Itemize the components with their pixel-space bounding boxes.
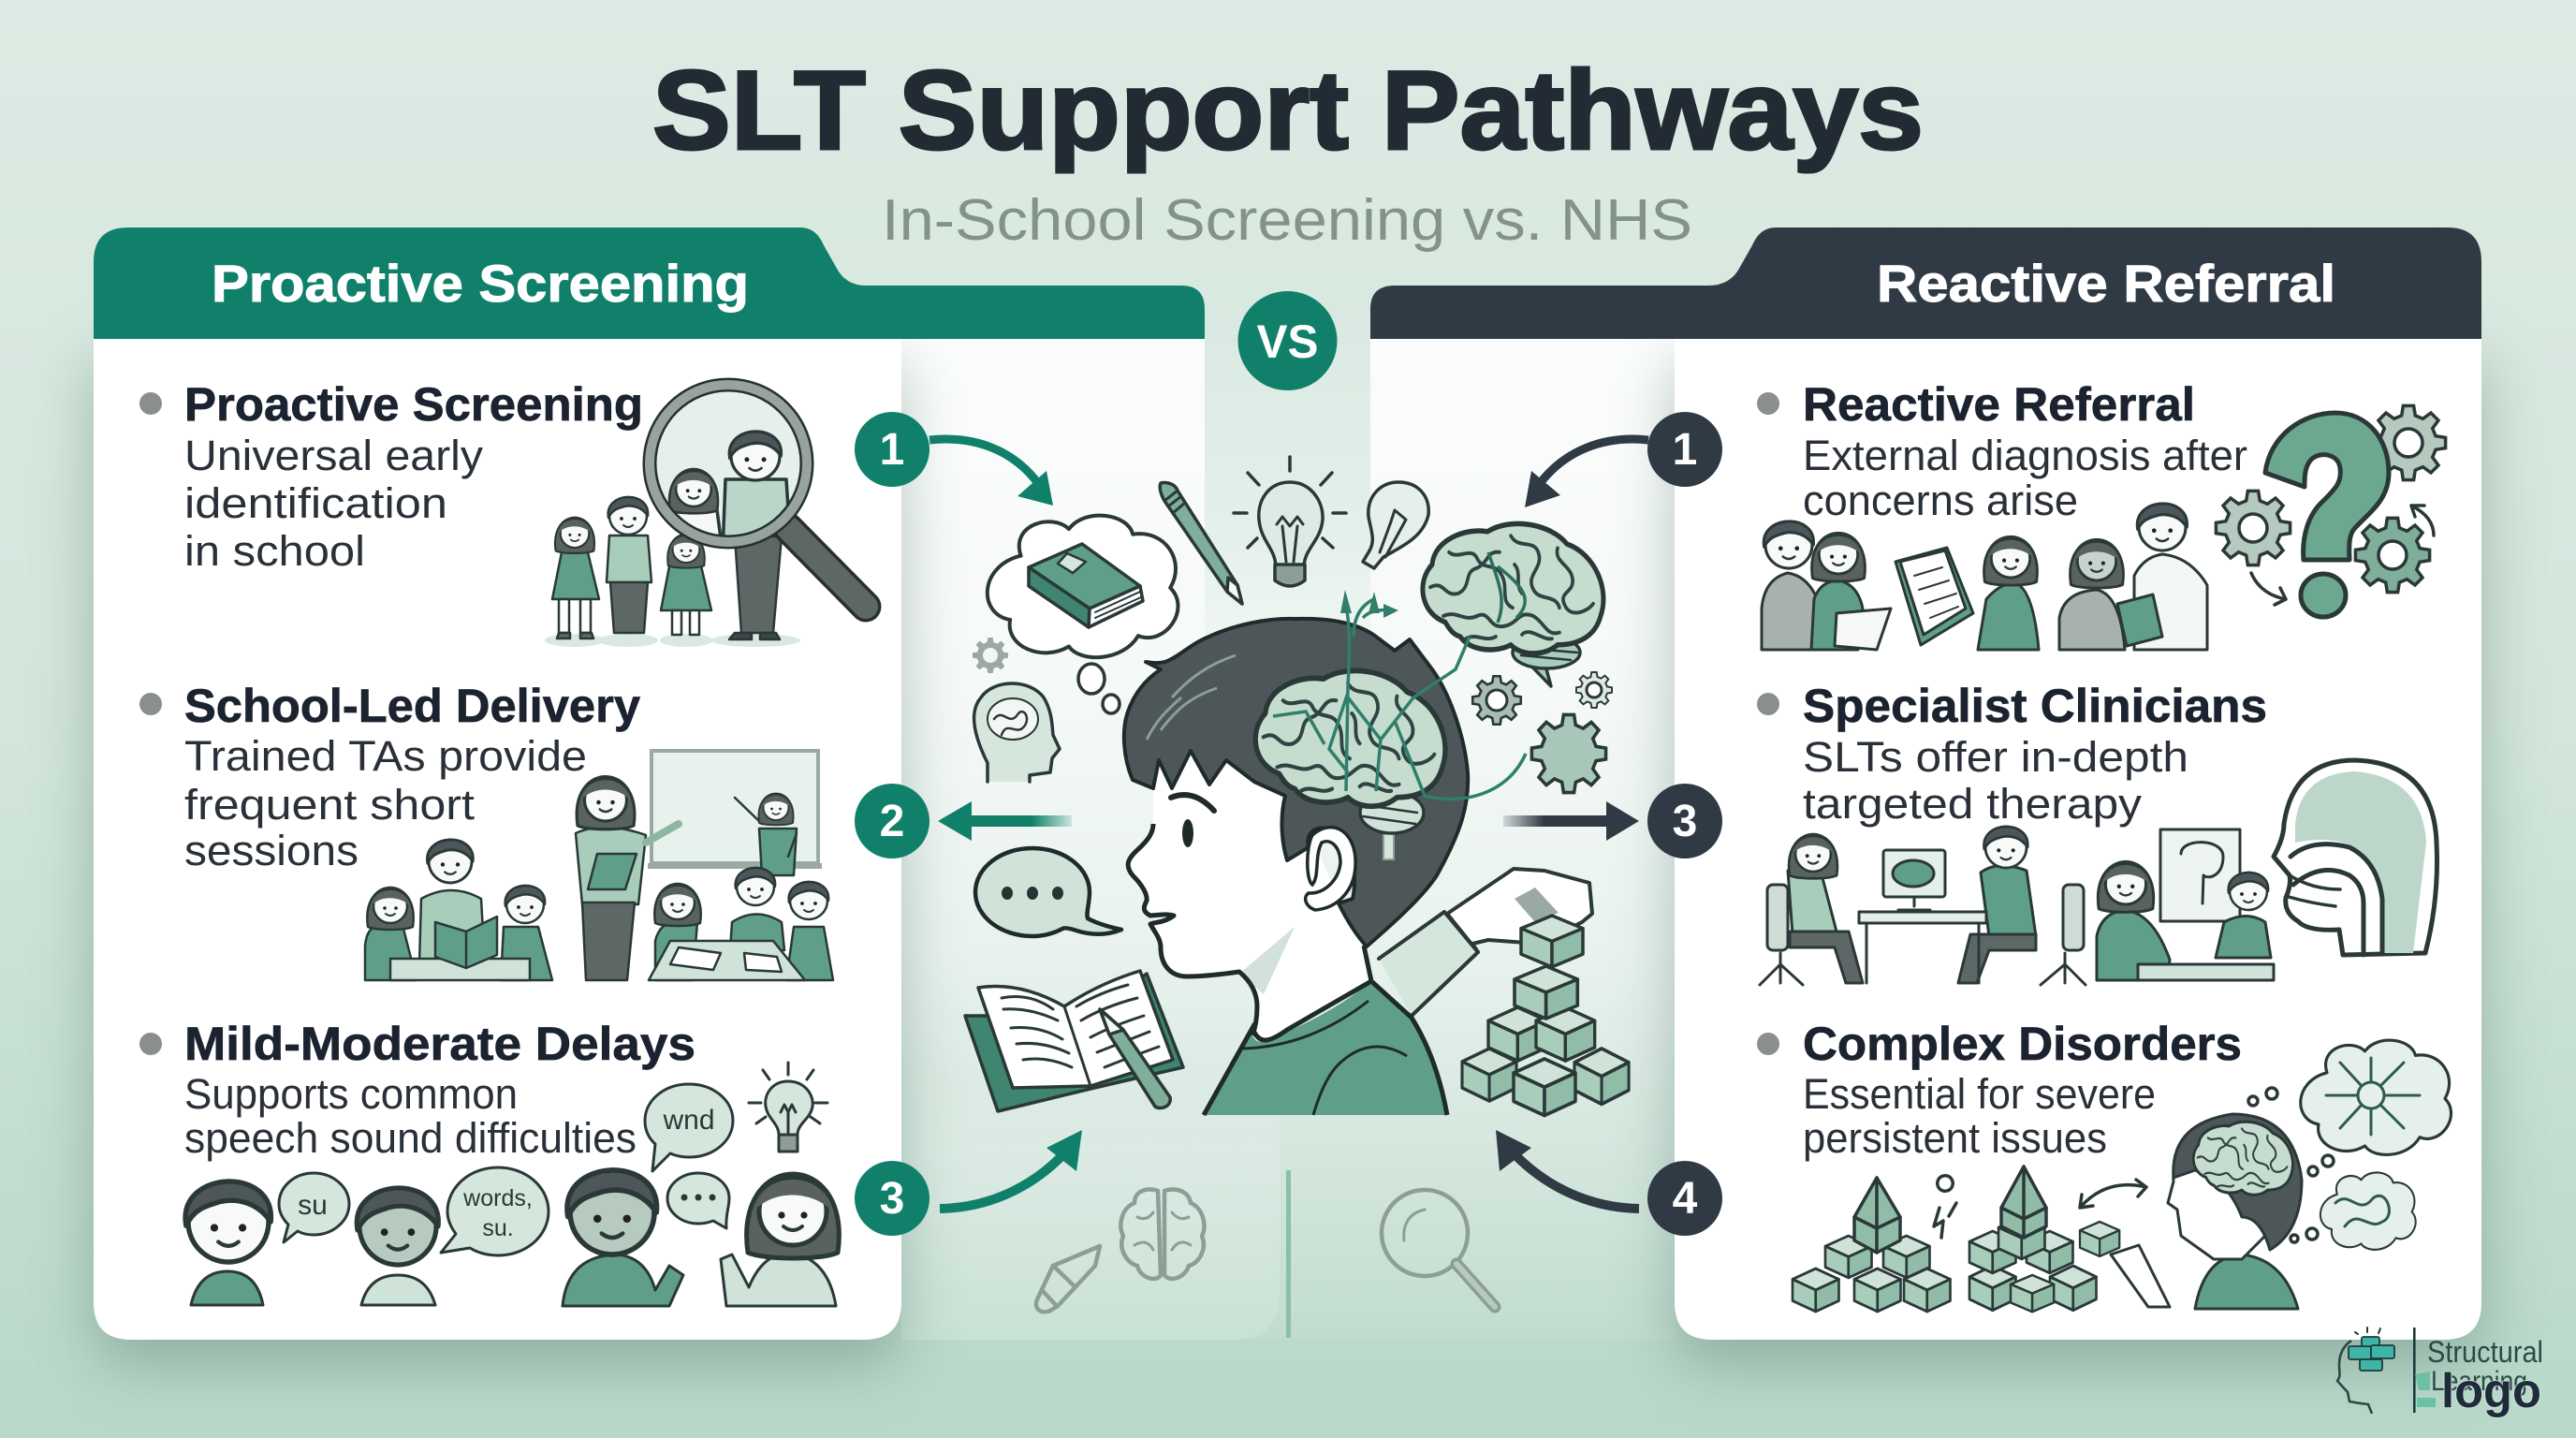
icon: large brain bbox=[1423, 523, 1603, 686]
icon: question mark and gears bbox=[2216, 405, 2446, 617]
icon: thought cloud with book bbox=[988, 516, 1178, 713]
step 1 right: badge and curved arrow bbox=[1525, 412, 1722, 507]
step 1 left: badge and curved arrow bbox=[855, 412, 1053, 506]
right item 1: reactive referral text bbox=[1757, 378, 2247, 524]
icon: head cross-section of vocal tract bbox=[2274, 760, 2437, 955]
left item 1: proactive screening text: Proactive Screening bbox=[184, 378, 643, 431]
right item 1: reactive referral text: External diagnosis after bbox=[1803, 432, 2247, 479]
right item 2: specialist clinicians text bbox=[1757, 680, 2267, 828]
badge: VS bbox=[1237, 291, 1337, 390]
icon: children talking with speech bubbles bbox=[185, 1063, 839, 1306]
header: reactive referral: Reactive Referral bbox=[1877, 254, 2335, 313]
right item 2: specialist clinicians text: SLTs offer in-depth bbox=[1803, 733, 2188, 781]
left item 3: mild-moderate delays text: Mild-Moderate Delays bbox=[184, 1018, 695, 1070]
icon: children talking with speech bubbles: su bbox=[298, 1190, 328, 1221]
icon: children talking with speech bubbles: su. bbox=[482, 1215, 514, 1241]
left item 1: proactive screening text: identification bbox=[184, 479, 447, 527]
left item 3: mild-moderate delays text: speech sound difficulties bbox=[184, 1114, 637, 1162]
icon: block towers bbox=[1793, 1167, 2146, 1312]
panel: centre illustration backdrop bbox=[901, 309, 1675, 1340]
step 2 left: badge and arrow bbox=[855, 784, 1072, 858]
left item 1: proactive screening text bbox=[139, 378, 643, 575]
logo: Structural bbox=[2427, 1335, 2543, 1369]
right item 3: complex disorders text bbox=[1757, 1018, 2242, 1162]
left item 1: proactive screening text: Universal early bbox=[184, 432, 484, 479]
faint icon: brain bbox=[1120, 1190, 1205, 1279]
logo bbox=[2337, 1328, 2543, 1418]
left item 3: mild-moderate delays text: Supports common bbox=[184, 1070, 518, 1118]
step 3 right: badge and arrow bbox=[1503, 784, 1722, 858]
icon: boy thinking with brain bbox=[2111, 1040, 2452, 1309]
icon: small gear bbox=[973, 638, 1008, 673]
icon: magnifier over children and adult bbox=[545, 385, 866, 647]
step 4 right: badge and curved arrow: 4 bbox=[1673, 1174, 1698, 1224]
step 3 left: badge and curved arrow: 3 bbox=[880, 1174, 904, 1224]
right item 1: reactive referral text: Reactive Referral bbox=[1803, 378, 2195, 431]
step 1 right: badge and curved arrow: 1 bbox=[1673, 425, 1697, 475]
icon: block pyramid bbox=[1462, 916, 1629, 1115]
left item 2: school-led delivery text: Trained TAs provide bbox=[184, 732, 587, 780]
step 3 left: badge and curved arrow bbox=[855, 1130, 1082, 1236]
icon: children talking with speech bubbles: words, bbox=[462, 1185, 533, 1211]
header: proactive screening bbox=[94, 227, 1205, 339]
icon: parents and clinician with report bbox=[1762, 504, 2207, 650]
icon: small gears and connection bbox=[1472, 672, 1612, 793]
panel: reactive referral card bbox=[1675, 339, 2481, 1340]
step 2 left: badge and arrow: 2 bbox=[880, 797, 904, 846]
panel: proactive screening card bbox=[94, 339, 901, 1340]
left item 2: school-led delivery text bbox=[139, 680, 640, 874]
illustration: boy in profile bbox=[1124, 590, 1592, 1115]
icon: children talking with speech bubbles: wnd bbox=[662, 1105, 715, 1136]
faint icon: pencil bbox=[1036, 1246, 1100, 1312]
icon: speech bubble with dots bbox=[975, 848, 1121, 936]
step 4 right: badge and curved arrow bbox=[1496, 1130, 1722, 1236]
right item 3: complex disorders text: Essential for severe bbox=[1803, 1070, 2156, 1118]
logo: logo bbox=[2441, 1364, 2541, 1418]
step 1 left: badge and curved arrow: 1 bbox=[880, 425, 904, 475]
icon: open book with pencil bbox=[965, 971, 1183, 1111]
right item 3: complex disorders text: Complex Disorders bbox=[1803, 1018, 2242, 1070]
header: proactive screening: Proactive Screening bbox=[212, 254, 749, 313]
right item 2: specialist clinicians text: Specialist Clinicians bbox=[1803, 680, 2267, 732]
badge: VS: VS bbox=[1256, 315, 1318, 368]
icon: classroom with teacher and pupils bbox=[365, 751, 833, 980]
divider bbox=[1286, 1170, 1291, 1338]
left item 2: school-led delivery text: sessions bbox=[184, 827, 359, 874]
logo: Learning bbox=[2431, 1366, 2527, 1397]
left item 2: school-led delivery text: School-Led Delivery bbox=[184, 680, 640, 732]
right item 1: reactive referral text: concerns arise bbox=[1803, 477, 2078, 524]
left item 1: proactive screening text: in school bbox=[184, 527, 365, 575]
left item 2: school-led delivery text: frequent short bbox=[184, 781, 476, 829]
title: SLT Support Pathways bbox=[652, 48, 1924, 173]
step 3 right: badge and arrow: 3 bbox=[1673, 797, 1697, 846]
icon: clinician and patient at desk bbox=[1760, 827, 2274, 985]
icon: light bulbs bbox=[1234, 457, 1428, 586]
left item 3: mild-moderate delays text bbox=[139, 1018, 695, 1162]
icon: pencil bbox=[1160, 482, 1242, 604]
subtitle: In-School Screening vs. NHS bbox=[882, 188, 1692, 253]
icon: head profile with brain bbox=[974, 683, 1060, 782]
right item 2: specialist clinicians text: targeted therapy bbox=[1803, 780, 2143, 828]
right item 3: complex disorders text: persistent issues bbox=[1803, 1114, 2107, 1162]
header: reactive referral bbox=[1370, 227, 2481, 339]
faint icon: magnifier bbox=[1382, 1190, 1495, 1307]
